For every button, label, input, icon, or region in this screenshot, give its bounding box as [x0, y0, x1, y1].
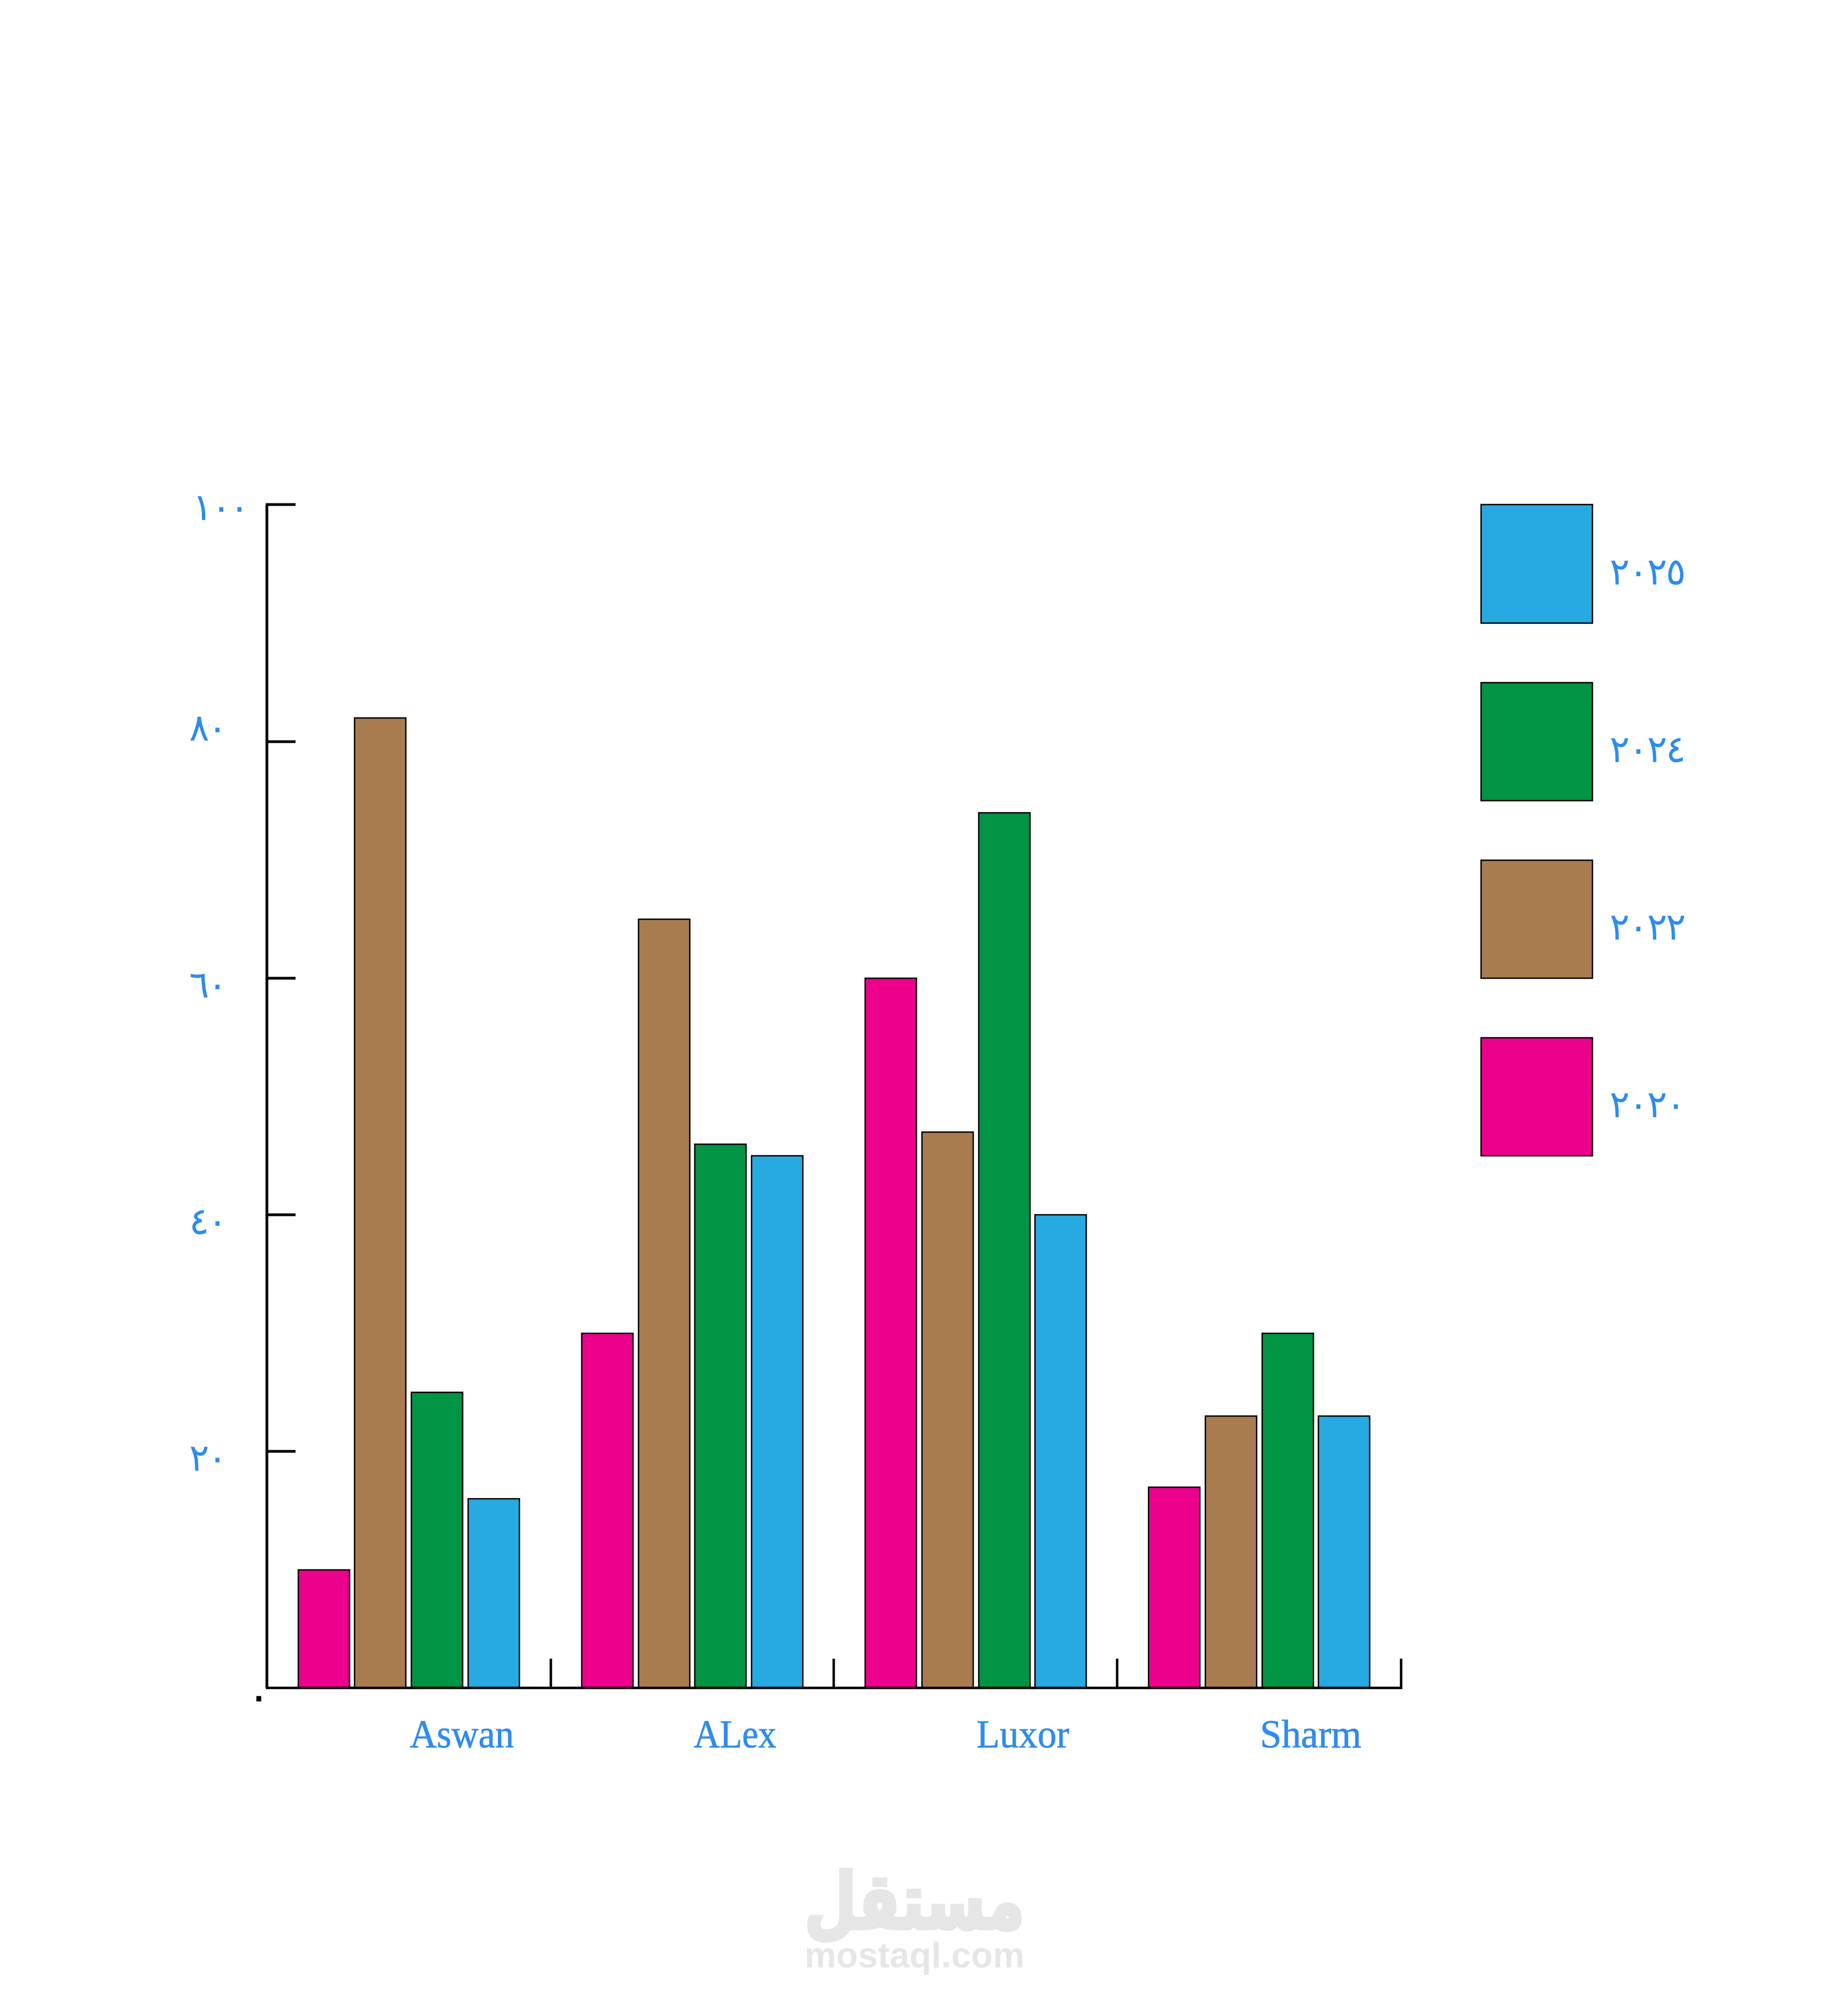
x axis with ticks	[266, 1659, 1402, 1689]
legend swatch 2025	[1481, 505, 1592, 623]
legend swatch 2020	[1481, 1038, 1592, 1156]
legend label 2020: ٢٠٢٠	[1610, 1083, 1686, 1127]
category labels	[410, 1712, 1361, 1756]
bars: Aswan	[298, 718, 519, 1688]
legend	[1481, 505, 1686, 1156]
bars: Luxor	[865, 813, 1086, 1688]
bars: ALex	[582, 919, 803, 1688]
bars: Sharm	[1149, 1333, 1370, 1688]
legend label 2025: ٢٠٢٥	[1610, 550, 1686, 594]
category labels: Sharm	[1260, 1712, 1361, 1756]
watermark logo text: مستقل	[804, 1857, 1025, 1947]
category labels: Aswan	[410, 1712, 514, 1756]
legend swatch 2022	[1481, 860, 1592, 978]
origin label: ٠	[248, 1673, 270, 1719]
legend label 2022: ٢٠٢٢	[1610, 905, 1686, 949]
y axis labels: ٦٠	[189, 963, 228, 1007]
y axis labels: ٨٠	[189, 706, 228, 750]
y axis labels	[189, 486, 270, 1719]
y axis labels: ١٠٠	[192, 486, 250, 529]
legend swatch 2024	[1481, 683, 1592, 801]
watermark url: mostaql.com	[804, 1935, 1025, 1975]
category labels: Luxor	[977, 1712, 1069, 1756]
legend label 2024: ٢٠٢٤	[1610, 728, 1686, 771]
y axis labels: ٢٠	[189, 1436, 228, 1480]
category labels: ALex	[694, 1712, 776, 1756]
y axis labels: ٤٠	[189, 1200, 228, 1243]
y axis with ticks	[266, 505, 296, 1688]
